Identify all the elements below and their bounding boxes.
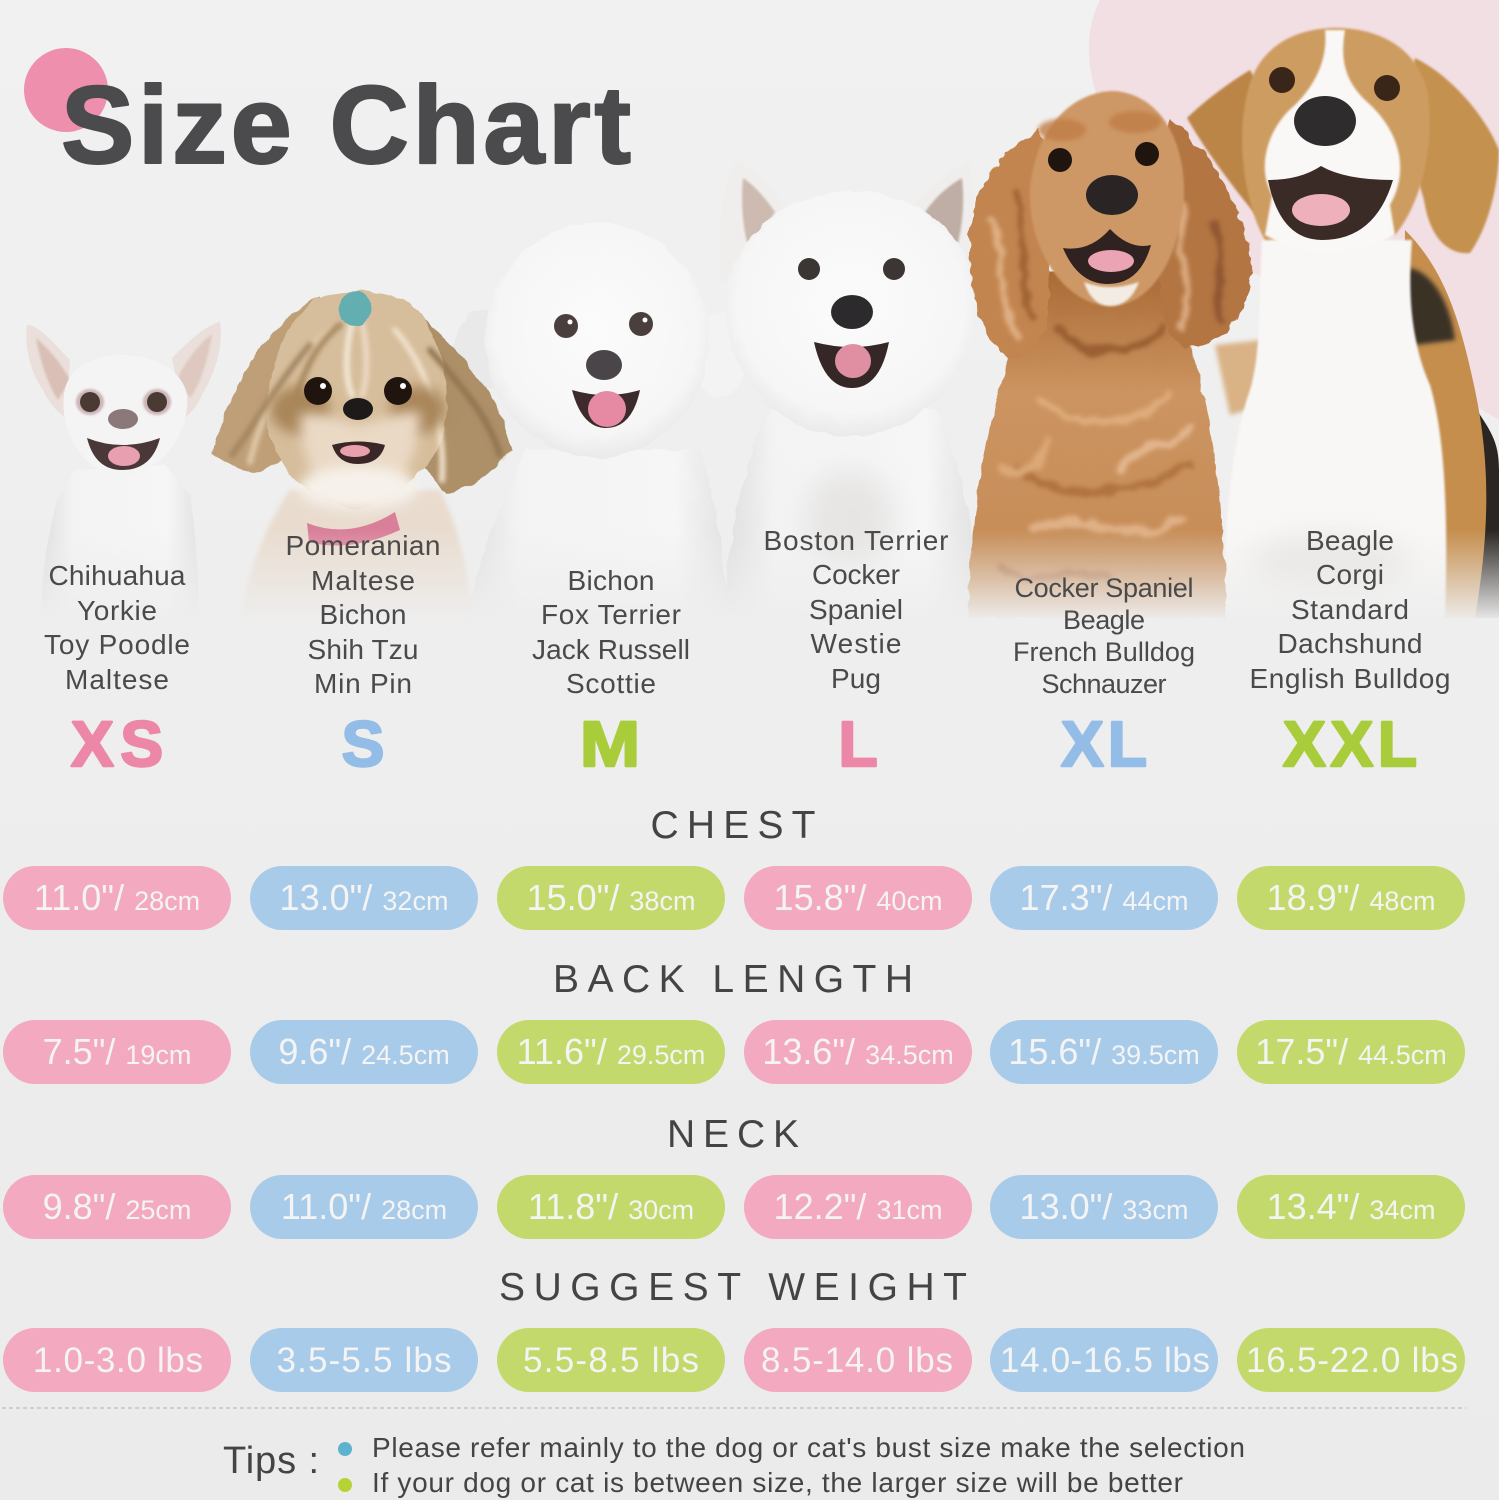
size labels: S bbox=[342, 708, 384, 780]
row: chest: 18.9"/ 48cm bbox=[1267, 877, 1435, 918]
heading: chest: CHEST bbox=[650, 804, 816, 847]
heading: neck: NECK bbox=[667, 1113, 799, 1156]
row: suggest weight: 3.5-5.5 lbs bbox=[276, 1341, 452, 1380]
row: neck: 9.8"/ 25cm bbox=[43, 1186, 191, 1227]
size labels: XXL bbox=[1283, 708, 1417, 780]
row: suggest weight: 5.5-8.5 lbs bbox=[523, 1341, 699, 1380]
row: neck: 13.0"/ 33cm bbox=[1020, 1186, 1188, 1227]
size labels: XS bbox=[71, 708, 163, 780]
row: neck bbox=[3, 1175, 1465, 1239]
tips bbox=[223, 1432, 1245, 1498]
breed list: L: Spaniel bbox=[809, 594, 903, 625]
breed list: XL: Schnauzer bbox=[1042, 669, 1166, 699]
tips: Please refer mainly to the dog or cat's bust size make the selection bbox=[372, 1432, 1245, 1463]
dog photo: shih tzu bbox=[213, 291, 513, 618]
size labels: XL bbox=[1061, 708, 1147, 780]
size labels: L bbox=[838, 708, 878, 780]
row: chest: 15.8"/ 40cm bbox=[774, 877, 942, 918]
breed list: XXL: Beagle bbox=[1306, 525, 1394, 556]
row: neck: 11.8"/ 30cm bbox=[528, 1186, 694, 1227]
row: suggest weight: 1.0-3.0 lbs bbox=[33, 1341, 203, 1380]
breed list: XL: Cocker Spaniel bbox=[1014, 573, 1194, 603]
row: neck: 11.0"/ 28cm bbox=[281, 1186, 447, 1227]
row: back length: 7.5"/ 19cm bbox=[43, 1031, 191, 1072]
breed list: XXL: Dachshund bbox=[1278, 628, 1422, 659]
pink background shape bbox=[1089, 0, 1499, 420]
breed list: XXL: Corgi bbox=[1316, 559, 1384, 590]
breed list: M: Scottie bbox=[566, 668, 656, 699]
breed list: S: Pomeranian bbox=[286, 530, 440, 561]
breed list: XL: Beagle bbox=[1063, 605, 1145, 635]
heading: back length: BACK LENGTH bbox=[553, 958, 913, 1001]
breed list: M: Fox Terrier bbox=[541, 599, 681, 630]
breed list: XXL bbox=[1250, 525, 1450, 694]
row: back length: 13.6"/ 34.5cm bbox=[762, 1031, 954, 1072]
breed list: M bbox=[532, 565, 690, 699]
breed list: XS: Maltese bbox=[65, 664, 169, 695]
breed list: L: Boston Terrier bbox=[764, 525, 948, 556]
dog photo: beagle bbox=[1187, 28, 1499, 618]
fade below dogs bbox=[0, 530, 1499, 622]
breed list: L bbox=[764, 525, 948, 694]
row: suggest weight: 8.5-14.0 lbs bbox=[761, 1341, 953, 1380]
breed list: XS: Yorkie bbox=[77, 595, 157, 626]
dog photo: bichon bbox=[453, 223, 747, 618]
row: back length: 9.6"/ 24.5cm bbox=[278, 1031, 450, 1072]
breed list: S bbox=[286, 530, 440, 699]
row: neck: 12.2"/ 31cm bbox=[774, 1186, 942, 1227]
breed list: XS: Toy Poodle bbox=[44, 629, 190, 660]
breed list: M: Bichon bbox=[568, 565, 654, 596]
breed list: S: Shih Tzu bbox=[308, 634, 418, 665]
row: chest: 15.0"/ 38cm bbox=[527, 877, 695, 918]
row: back length: 11.6"/ 29.5cm bbox=[517, 1031, 705, 1072]
size labels bbox=[71, 708, 1417, 780]
row: suggest weight bbox=[3, 1328, 1465, 1392]
row: neck: 13.4"/ 34cm bbox=[1267, 1186, 1435, 1227]
breed list: S: Bichon bbox=[320, 599, 406, 630]
row: chest: 17.3"/ 44cm bbox=[1020, 877, 1188, 918]
row: back length bbox=[3, 1020, 1465, 1084]
breed list: XS bbox=[44, 560, 190, 695]
heading: suggest weight: SUGGEST WEIGHT bbox=[499, 1266, 967, 1309]
row: chest bbox=[3, 866, 1465, 930]
dog photo: chihuahua bbox=[26, 322, 221, 618]
row: back length: 17.5"/ 44.5cm bbox=[1255, 1031, 1447, 1072]
dog photo: westie bbox=[719, 160, 977, 618]
breed list: L: Pug bbox=[831, 663, 881, 694]
row: back length: 15.6"/ 39.5cm bbox=[1008, 1031, 1200, 1072]
tips: If your dog or cat is between size, the larger size will be better bbox=[372, 1467, 1183, 1498]
title: Size Chart: Size Chart bbox=[61, 64, 631, 187]
breed list: S: Maltese bbox=[311, 565, 415, 596]
breed list: L: Westie bbox=[810, 628, 902, 659]
row: chest: 13.0"/ 32cm bbox=[280, 877, 448, 918]
size labels: M bbox=[580, 708, 640, 780]
breed list: XXL: Standard bbox=[1291, 594, 1409, 625]
breed list: L: Cocker bbox=[812, 559, 900, 590]
dog photo: cocker spaniel bbox=[968, 91, 1252, 618]
row: suggest weight: 16.5-22.0 lbs bbox=[1246, 1341, 1458, 1380]
breed list: XS: Chihuahua bbox=[48, 560, 186, 591]
row: suggest weight: 14.0-16.5 lbs bbox=[1000, 1341, 1210, 1380]
breed list: S: Min Pin bbox=[314, 668, 412, 699]
row: chest: 11.0"/ 28cm bbox=[34, 877, 200, 918]
breed list: XXL: English Bulldog bbox=[1250, 663, 1450, 694]
tips: Tips : bbox=[223, 1440, 319, 1482]
breed list: M: Jack Russell bbox=[532, 634, 690, 665]
breed list: XL: French Bulldog bbox=[1013, 637, 1195, 667]
breed list: XL bbox=[1013, 573, 1195, 699]
